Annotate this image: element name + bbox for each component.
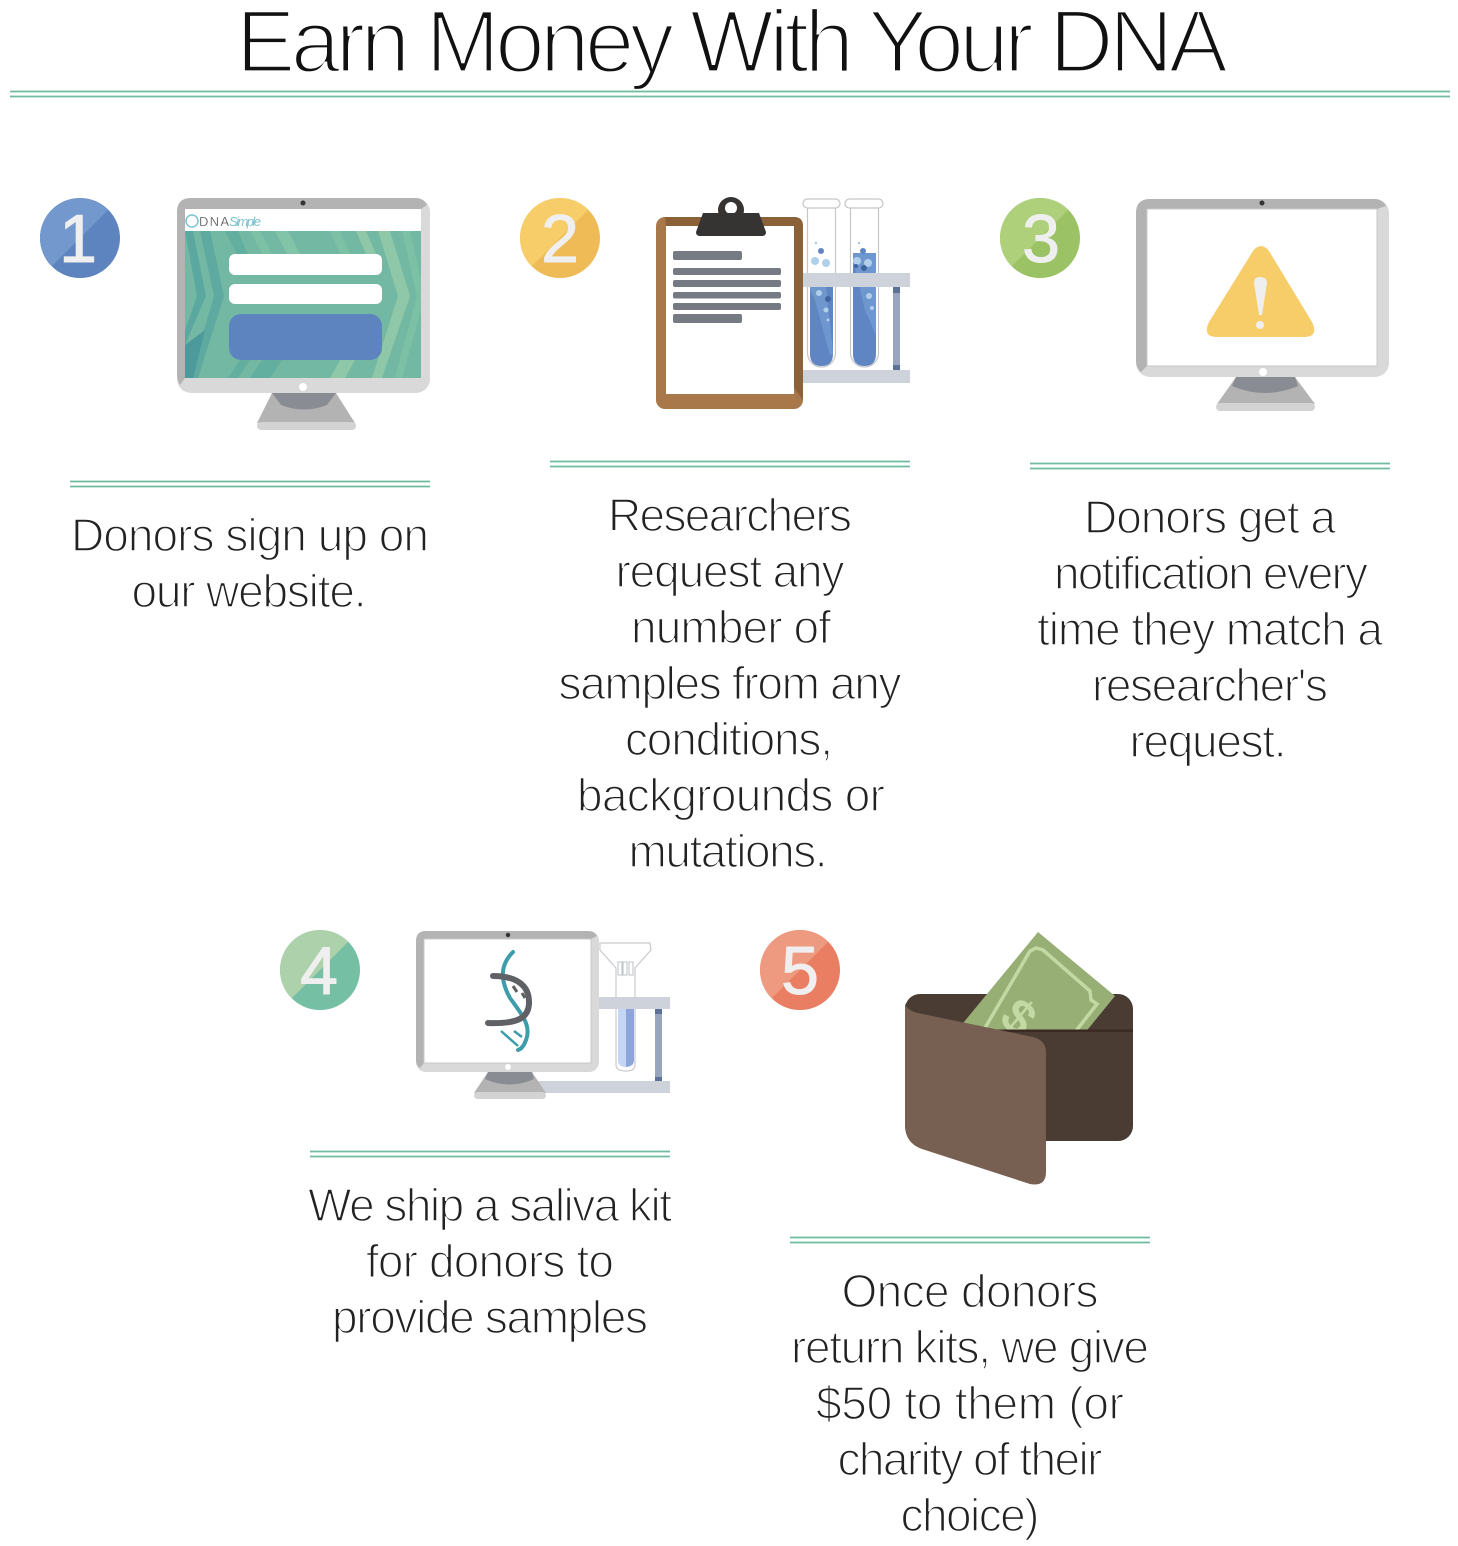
number badge 3: 3 [1022, 201, 1060, 277]
text: step 2: conditions, [625, 713, 833, 765]
icon: monitor with sign-up page [177, 198, 430, 430]
icon: monitor with DNA helix [416, 931, 599, 1099]
text: step 3: researcher's [1092, 659, 1328, 711]
number badge 5: 5 [781, 933, 819, 1009]
divider 1 [70, 482, 430, 486]
text: step 4: provide samples [332, 1291, 648, 1343]
text: step 2: mutations. [628, 825, 828, 877]
text: step 4: We ship a saliva kit [308, 1179, 672, 1231]
divider 3 [1030, 464, 1390, 468]
text: step 5 [791, 1265, 1149, 1541]
icon: monitor with sign-up page: DNA [199, 214, 229, 229]
icon: wallet with banknote [905, 932, 1133, 1184]
divider 4 [310, 1152, 670, 1156]
number badge 3 [1000, 198, 1080, 278]
text: step 2: backgrounds or [577, 769, 885, 821]
number badge 4 [280, 930, 360, 1010]
divider 5 [790, 1238, 1150, 1242]
text: step 1 [71, 509, 429, 617]
number badge 2 [520, 198, 600, 278]
number badge 1: 1 [59, 201, 97, 277]
panel: step 1 [30, 188, 430, 617]
text: step 2: number of [631, 601, 831, 653]
text: step 1: our website. [132, 565, 366, 617]
text: step 4 [308, 1179, 672, 1343]
icon: test tubes in rack [803, 199, 910, 383]
panel: step 3 [990, 188, 1390, 767]
icon: clipboard [656, 197, 803, 409]
number badge 4: 4 [300, 933, 338, 1009]
text: step 2: request any [616, 545, 844, 597]
text: step 5: charity of their [838, 1433, 1102, 1485]
text: step 5: Once donors [842, 1265, 1098, 1317]
icon: monitor with warning [1136, 199, 1389, 411]
number badge 1 [40, 198, 120, 278]
title [10, 0, 1450, 96]
icon: wallet with banknote: $ [990, 987, 1047, 1048]
panel: step 2 [510, 188, 910, 877]
icon: monitor with sign-up page: Simple [229, 214, 261, 229]
text: step 2 [558, 489, 902, 877]
text: step 5: return kits, we give [791, 1321, 1149, 1373]
text: step 5: choice) [900, 1489, 1040, 1541]
panel: step 4 [270, 920, 672, 1343]
icon: saliva tube and rack [537, 943, 670, 1093]
text: step 3: request. [1130, 715, 1286, 767]
text: step 5: $50 to them (or [816, 1377, 1124, 1429]
text: step 2: samples from any [558, 657, 902, 709]
divider 2 [550, 462, 910, 466]
text: step 2: Researchers [608, 489, 852, 541]
text: step 3: time they match a [1037, 603, 1383, 655]
text: step 3: notification every [1054, 547, 1368, 599]
text: step 1: Donors sign up on [71, 509, 429, 561]
text: step 4: for donors to [366, 1235, 614, 1287]
panel: step 5 [750, 920, 1150, 1541]
text: step 3 [1037, 491, 1383, 767]
text: step 3: Donors get a [1084, 491, 1336, 543]
number badge 5 [760, 930, 840, 1010]
number badge 2: 2 [541, 201, 579, 277]
